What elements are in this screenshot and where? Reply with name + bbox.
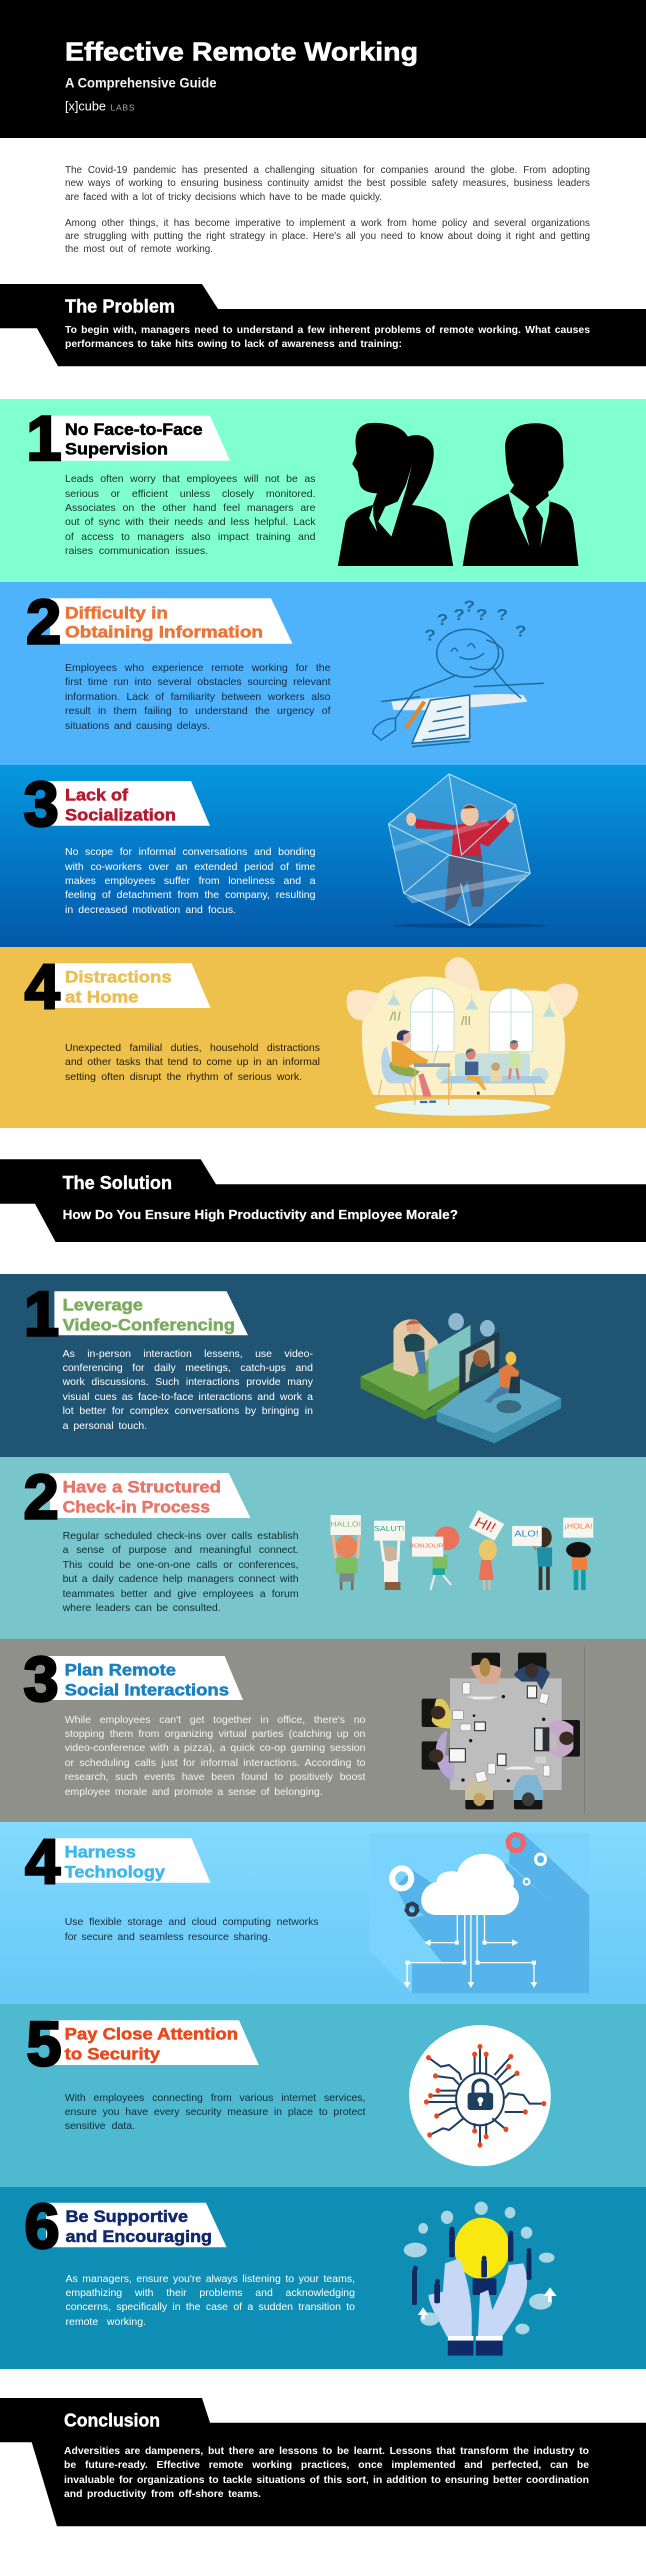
body text: empathizing with their problems and acknowledging [66,2287,355,2299]
number 1: 1 [26,404,62,474]
body text: for secure and seamless resource sharing. [65,1931,271,1943]
heading label: Video-Conferencing [63,1316,235,1334]
icon: people holding greeting signs: HI! [472,1515,499,1536]
body text: Regular scheduled check-ins over calls establish [63,1530,299,1542]
body text [64,2092,366,2132]
body text: Use flexible storage and cloud computing networks [65,1916,319,1928]
panel: header [0,0,646,138]
heading label: Leverage [63,1297,143,1315]
heading label: Plan Remote [65,1661,176,1679]
icon: people holding greeting signs [330,1510,593,1590]
body text: and other tasks that tend to come up in an informal [65,1056,320,1068]
body text [66,2272,355,2328]
body text: No scope for informal conversations and bonding [65,846,316,858]
body text: teammates better and give employees a forum [63,1588,299,1600]
body text: a sense of purpose and meaningful connect. [63,1544,299,1556]
body text: ensure you have every security measure in place to protect [65,2106,365,2118]
body text [65,846,316,916]
heading label: Obtaining Information [65,623,263,641]
panel: solution 2 structured check-in process [0,1457,646,1639]
icon: question marks: ? [453,606,465,624]
icon: home office illustration [347,957,578,1116]
panel: conclusion [0,2398,646,2526]
heading: the problem: The Problem [65,296,175,317]
number 3: 3 [23,1645,59,1715]
text block: introduction [65,165,590,255]
text block: introduction: the most out of remote working. [65,244,213,255]
number 5: 5 [26,2010,62,2080]
panel: problem 3 lack of socialization [0,765,646,947]
heading label: Supervision [65,440,168,458]
icon: question marks: ? [424,626,436,644]
icon: hands holding a light bulb [404,2202,557,2356]
body text: stopping them from organizing virtual parties (catching up on [65,1728,365,1740]
heading: the solution: The Solution [63,1172,172,1193]
heading label [46,1656,243,1700]
body text: This could be one-on-one calls or conferences, [63,1559,299,1571]
icon: person in a glass cube [389,774,546,928]
icon: cloud computing network [370,1833,589,1993]
body text: where leaders can be consulted. [63,1602,221,1614]
number 4: 4 [25,1828,60,1898]
body text [65,662,331,732]
body text: or scheduling calls just for informal interactions. According to [65,1757,365,1769]
number 2: 2 [26,588,61,658]
body text: but a daily cadence help managers connect with [63,1573,299,1585]
text block: introduction: are faced with a lot of tricky decisions which have to be made quickly. [65,192,382,203]
logo [65,98,135,113]
body text: sensitive data. [65,2120,135,2132]
problem intro text [65,325,590,350]
solution question: How Do You Ensure High Productivity and Employee Morale? [63,1208,458,1222]
body text: information. Lack of familiarity between workers also [65,691,330,703]
body text: Associates on the other hand feel managers are [65,502,316,514]
body text [65,473,316,557]
heading label: to Security [65,2045,161,2063]
icon: question marks: ? [476,606,487,624]
body text: in decreased motivation and focus. [65,904,236,916]
panel: the problem banner [0,284,646,366]
conclusion text: Adversities are dampeners, but there are lessons to be learnt. Lessons that transform the industry to [64,2446,589,2457]
number 6: 6 [24,2192,60,2262]
conclusion text: and productivity from off-shore teams. [64,2489,261,2500]
conclusion text [64,2446,589,2500]
heading label: Distractions [65,969,172,987]
panel: the solution banner [0,1159,646,1242]
body text: Leads often worry that employees will not be as [65,473,316,485]
icon: isometric video call illustration [360,1313,561,1443]
icon: question marks: ? [437,611,448,629]
heading label: Technology [65,1863,166,1881]
icon: question marks: ? [515,622,527,640]
heading label: No Face-to-Face [65,421,203,439]
panel: solution 6 be supportive and encouraging [0,2187,646,2369]
subtitle: A Comprehensive Guide [65,74,217,90]
body text: with co-workers over an extended period of time [65,861,316,873]
number 1: 1 [24,1280,59,1350]
icon: meeting table seen from above [422,1647,584,1814]
panel: problem 4 distractions at home [0,947,646,1128]
number 3: 3 [24,770,59,840]
heading label [50,598,292,644]
body text: Unexpected familial duties, household distractions [65,1042,320,1054]
icon: people holding greeting signs: BONJOUR! [409,1543,446,1549]
body text: employee morale and promote a sense of belonging. [65,1786,323,1798]
heading label: Check-in Process [63,1499,210,1517]
body text: As managers, ensure you're always listening to your teams, [66,2272,355,2284]
body text [65,1042,320,1083]
body text [62,1348,313,1432]
body text: Employees who experience remote working for the [65,662,330,674]
heading label: Socialization [65,807,176,825]
icon: confused person sketch [373,629,544,747]
body text: result in them failing to understand the urgency of [65,705,330,717]
heading label: Have a Structured [63,1479,221,1497]
heading label [50,1473,250,1518]
heading label [46,1838,210,1883]
body text [64,1714,366,1798]
text block: introduction: Among other things, it has become imperative to implement a work from home policy and several organizations [65,218,590,229]
text block: introduction: are struggling with putting the right strategy in place. Here's all you need to know about doing it right and getting [65,231,590,242]
problem intro text: To begin with, managers need to understand a few inherent problems of remote working. What causes [65,325,590,336]
panel: solution 4 harness technology [0,1822,646,2004]
problem intro text: performances to take hits owing to lack of awareness and training: [65,339,402,350]
body text: work discussions. Such interactions provide many [63,1376,313,1388]
heading label: Harness [65,1843,136,1861]
heading label [54,1291,248,1335]
conclusion text: invaluable for organizations to tackle situations of this sort, in addition to ensuring better coordination [64,2475,589,2486]
panel: solution 5 pay close attention to security [0,2004,646,2187]
panel: problem 2 difficulty in obtaining information [0,582,646,765]
body text: While employees can't get together in office, there's no [65,1714,365,1726]
icon: question marks [424,597,527,644]
icon: people holding greeting signs: ALO! [514,1530,539,1539]
icon: padlock with circuit lines [409,2025,551,2166]
heading label: Be Supportive [66,2208,188,2226]
body text: first time run into several obstacles sourcing relevant [65,676,330,688]
body text: serious or efficient unless closely monitored. [65,488,316,500]
heading label [50,2020,259,2065]
body text: lot better for complex conversations by bringing in [63,1405,313,1417]
heading label [46,781,210,826]
body text: of access to managers also impact training and [65,531,316,543]
body text: feeling of detachment from the company, resulting [65,889,316,901]
heading: conclusion: Conclusion [64,2410,160,2431]
body text: With employees connecting from various internet services, [65,2092,365,2104]
number 2: 2 [24,1462,59,1532]
heading label: and Encouraging [66,2228,212,2246]
body text: concerns, specifically in the case of a sudden transition to [66,2301,355,2313]
logo: [x]cube [65,98,106,113]
body text: a personal touch. [63,1420,147,1432]
body text: video-conference with a pizza), a quick co-op gaming session [65,1742,365,1754]
logo: LABS [110,102,135,112]
title: Effective Remote Working [65,37,418,67]
panel: problem 1 no face-to-face supervision [0,399,646,582]
body text: situations and causing delays. [65,720,210,732]
icon: people holding greeting signs: HALLO! [330,1520,361,1528]
number 4: 4 [25,952,60,1022]
body text: research, such events have been found to positively boost [65,1771,365,1783]
heading label: Social Interactions [65,1681,229,1699]
panel: solution 1 leverage video-conferencing [0,1274,646,1457]
body text: conferencing for daily meetings, catch-ups and [63,1362,313,1374]
heading label: at Home [65,989,138,1007]
icon: question marks: ? [464,597,475,615]
body text: remote working. [66,2316,146,2328]
text block: introduction: The Covid-19 pandemic has presented a challenging situation for companies around the globe. From adopting [65,165,590,176]
body text: visual cues as face-to-face interactions and work a [63,1391,313,1403]
body text [64,1916,319,1943]
heading label [46,2203,227,2247]
text block: introduction: new ways of working to ensuring business continuity amidst the best possible safety measures, business leaders [65,178,590,189]
icon: silhouettes of a woman and a man [338,423,578,566]
icon: people holding greeting signs: ¡HOLA! [564,1522,593,1530]
heading label: Difficulty in [65,604,168,622]
icon: question marks: ? [496,606,508,624]
conclusion text: be future-ready. Effective remote working practices, once implemented and perfected, can be [64,2460,589,2471]
heading label [46,963,210,1008]
icon: people holding greeting signs: SALUT! [374,1525,404,1533]
body text: makes employees suffer from loneliness and a [65,875,316,887]
panel: solution 3 plan remote social interactions [0,1639,646,1822]
heading label: Lack of [65,787,129,805]
body text [62,1530,299,1614]
body text: raises communication issues. [65,545,208,557]
heading label: Pay Close Attention [65,2026,238,2044]
body text: setting often disrupt the rhythm of serious work. [65,1071,302,1083]
heading label [50,416,230,461]
body text: As in-person interaction lessens, use video- [63,1348,313,1360]
body text: out of sync with their needs and less helpful. Lack [65,516,316,528]
